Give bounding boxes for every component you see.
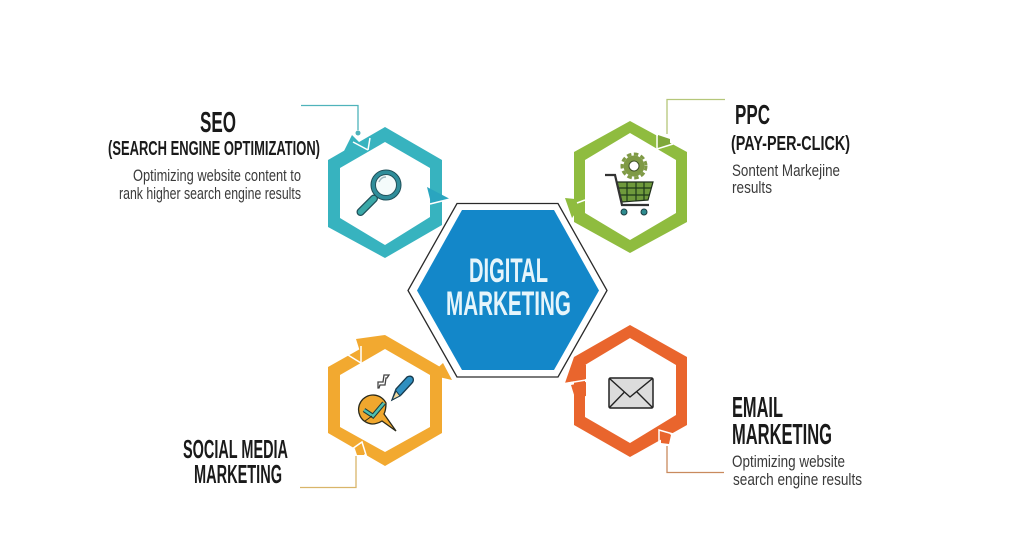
ring: social media hexagon: [328, 335, 452, 466]
ring: email hexagon: [565, 325, 687, 457]
description: email marketing: [732, 452, 862, 489]
hexagon outline: [408, 204, 607, 377]
description: PPC: [732, 161, 840, 197]
heading: social media marketing: [183, 434, 288, 489]
icon: envelope: [609, 378, 653, 408]
panel: SEO: [108, 106, 450, 258]
ring: PPC hexagon: [565, 121, 687, 253]
hexagon fill: [417, 210, 599, 370]
title: digital marketing: MARKETING: [446, 285, 571, 323]
description: SEO: [119, 166, 301, 203]
heading: PPC: PPC: [735, 99, 770, 130]
description: SEO: rank higher search engine results: [119, 184, 301, 203]
icon: shopping cart with gear: [605, 154, 653, 215]
description: email marketing: Optimizing website: [732, 452, 845, 471]
heading: social media marketing: SOCIAL MEDIA: [183, 434, 288, 464]
heading: email marketing: EMAIL: [732, 392, 783, 424]
description: PPC: Sontent Markejine: [732, 161, 840, 180]
heading: email marketing: MARKETING: [732, 419, 832, 451]
subheading: pay-per-click: (PAY-PER-CLICK): [731, 133, 850, 155]
icon: magnifying glass: [360, 170, 401, 212]
heading: social media marketing: MARKETING: [194, 459, 282, 489]
panel: central hexagon: [408, 204, 607, 377]
description: PPC: results: [732, 178, 772, 197]
description: email marketing: search engine results: [733, 470, 862, 489]
heading: email marketing: [732, 392, 832, 451]
panel: social media marketing: [183, 335, 452, 489]
icon: pen, squiggle and speech bubble: [359, 375, 413, 431]
panel: PPC: [565, 99, 850, 253]
connector line: email: [667, 446, 724, 472]
connector line: social media: [300, 456, 356, 488]
heading: SEO: SEO: [200, 107, 236, 139]
title: digital marketing: DIGITAL: [469, 252, 548, 290]
subheading: search engine optimization: (SEARCH ENGINE OPTIMIZATION): [108, 138, 320, 160]
connector line: SEO: [301, 106, 358, 130]
description: SEO: Optimizing website content to: [133, 166, 301, 185]
title: digital marketing: [446, 252, 571, 323]
ring: SEO hexagon: [328, 127, 450, 258]
connector line: PPC: [667, 100, 725, 134]
panel: email marketing: [565, 325, 862, 489]
